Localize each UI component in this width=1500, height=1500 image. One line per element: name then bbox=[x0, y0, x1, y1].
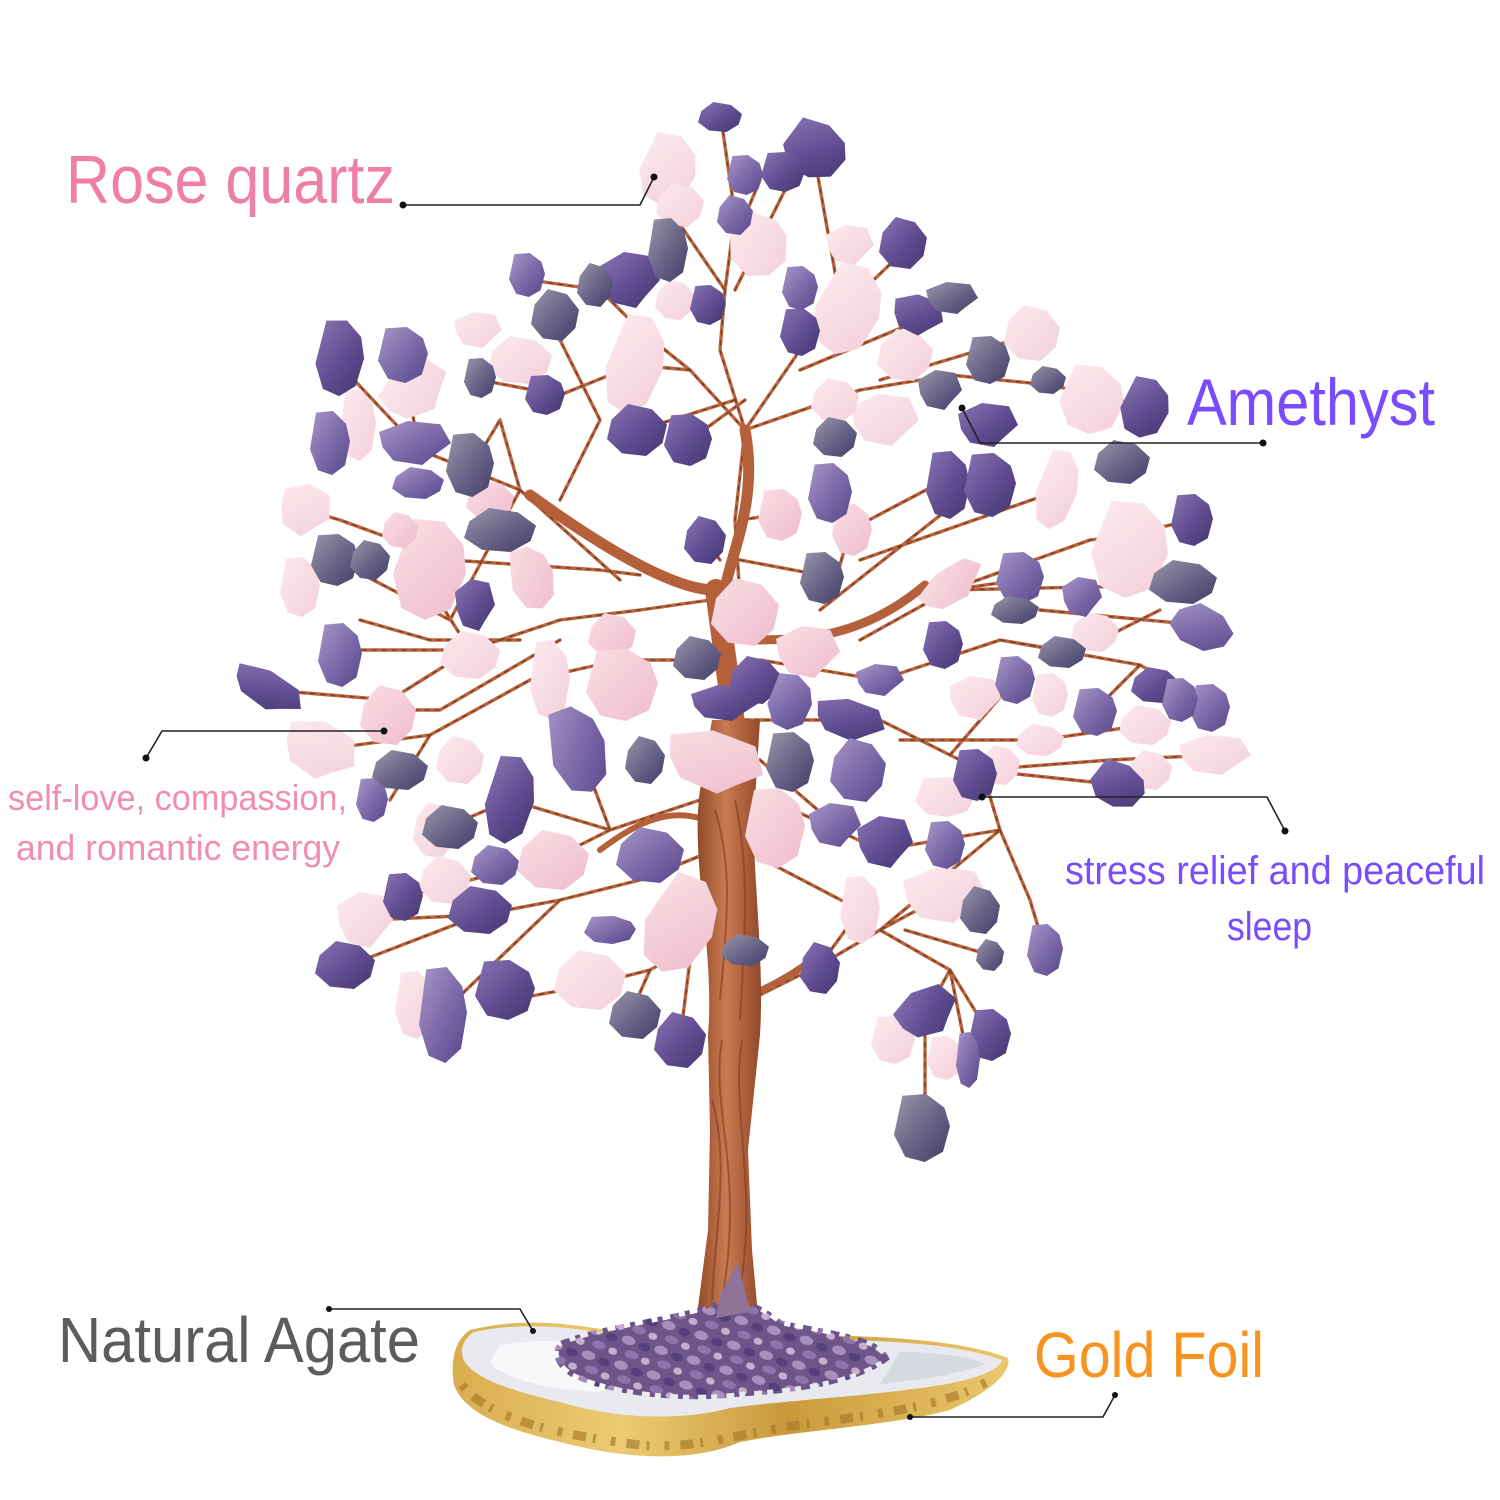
tree bbox=[226, 102, 1251, 1315]
darker rose quartz stones bbox=[360, 480, 992, 985]
callout: stress relief: stress relief and peaceful bbox=[1065, 849, 1485, 893]
gold foil texture bbox=[462, 1380, 990, 1446]
label: Gold Foil: Gold Foil bbox=[1034, 1319, 1264, 1391]
gold foil rim bbox=[453, 1323, 1008, 1456]
branches bbox=[270, 125, 1215, 1130]
rose quartz stones bbox=[272, 128, 1251, 1080]
label: Amethyst bbox=[958, 365, 1435, 446]
callout: self-love: and romantic energy bbox=[16, 827, 340, 868]
label: Amethyst: Amethyst bbox=[1187, 365, 1435, 439]
twisted copper trunk bbox=[697, 720, 761, 1315]
label: Gold Foil bbox=[907, 1319, 1264, 1420]
callout: self-love: self-love, compassion, bbox=[8, 777, 347, 818]
callout: stress relief bbox=[978, 794, 1485, 949]
thick main limbs bbox=[530, 430, 925, 1000]
agate base bbox=[453, 1323, 1008, 1456]
callout: stress relief: sleep bbox=[1227, 905, 1312, 949]
label: Natural Agate: Natural Agate bbox=[58, 1304, 420, 1376]
trunk wire strands bbox=[712, 800, 746, 1300]
mid amethyst stones bbox=[310, 155, 1240, 1088]
callout: self-love bbox=[8, 728, 388, 868]
dark amethyst stones bbox=[226, 102, 1213, 1068]
label: Rose quartz bbox=[66, 142, 658, 218]
label: Rose quartz: Rose quartz bbox=[66, 142, 395, 218]
grey amethyst stones bbox=[311, 218, 1217, 1162]
amethyst gravel mound bbox=[559, 1262, 884, 1395]
white agate slice bbox=[462, 1326, 1002, 1417]
